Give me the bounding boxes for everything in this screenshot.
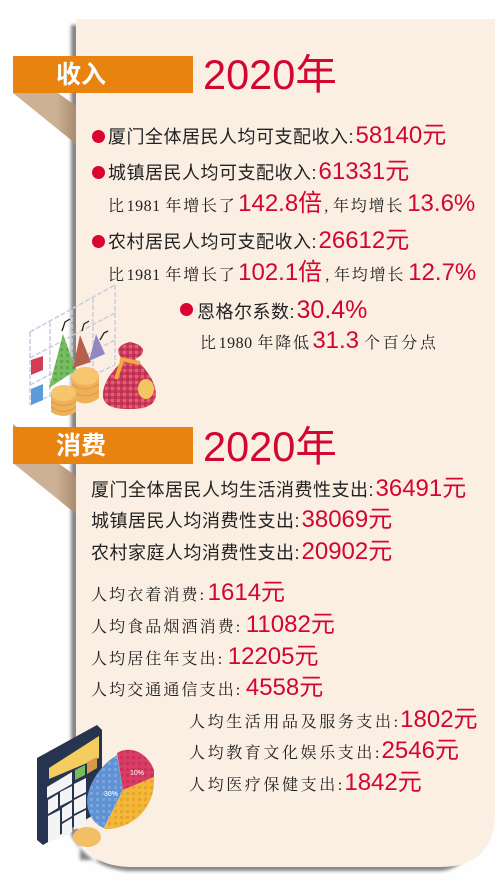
- heading: consumption year: 2020年: [203, 423, 337, 470]
- transport: 人均交通通信支出:4558元: [91, 674, 323, 701]
- icon: calculator, pie chart and coin: 30%: [104, 791, 118, 798]
- Xiamen spending: 厦门全体居民人均生活消费性支出:36491元: [91, 475, 466, 502]
- rural income: 农村居民人均可支配收入:26612元: [108, 227, 409, 254]
- urban growth: 比 1981 年增长了142.8倍,年均增长13.6%: [108, 190, 475, 217]
- household goods: 人均生活用品及服务支出:1802元: [189, 706, 478, 733]
- rural spending: 农村家庭人均消费性支出:20902元: [91, 538, 392, 565]
- Engel change: 比 1980 年降低31.3 个百分点: [200, 327, 438, 354]
- education: 人均教育文化娱乐支出:2546元: [189, 737, 459, 764]
- health: 人均医疗保健支出:1842元: [189, 769, 422, 796]
- Engel coefficient: 恩格尔系数:30.4%: [197, 296, 367, 324]
- housing: 人均居住年支出:12205元: [91, 643, 318, 670]
- icon: calculator, pie chart and coin: 10%: [130, 770, 144, 777]
- urban spending: 城镇居民人均消费性支出:38069元: [91, 506, 392, 533]
- rural growth: 比 1981 年增长了102.1倍,年均增长12.7%: [108, 259, 476, 286]
- heading: consumption band: 消费: [56, 432, 106, 460]
- clothing: 人均衣着消费:1614元: [91, 579, 285, 606]
- text block: consumption lines: [91, 475, 478, 796]
- heading: income band: 收入: [56, 61, 106, 89]
- heading: income band: [13, 56, 193, 93]
- food: 人均食品烟酒消费:11082元: [91, 611, 335, 638]
- bullet: [92, 166, 105, 179]
- urban income: 城镇居民人均可支配收入:61331元: [108, 158, 409, 185]
- bullet: [92, 235, 105, 248]
- heading: consumption band: [13, 427, 193, 464]
- text block: income lines: [92, 122, 476, 354]
- heading: income year: 2020年: [203, 51, 337, 98]
- bullet: [92, 130, 105, 143]
- Xiamen income: 厦门全体居民人均可支配收入:58140元: [108, 122, 446, 149]
- bullet: [180, 303, 193, 316]
